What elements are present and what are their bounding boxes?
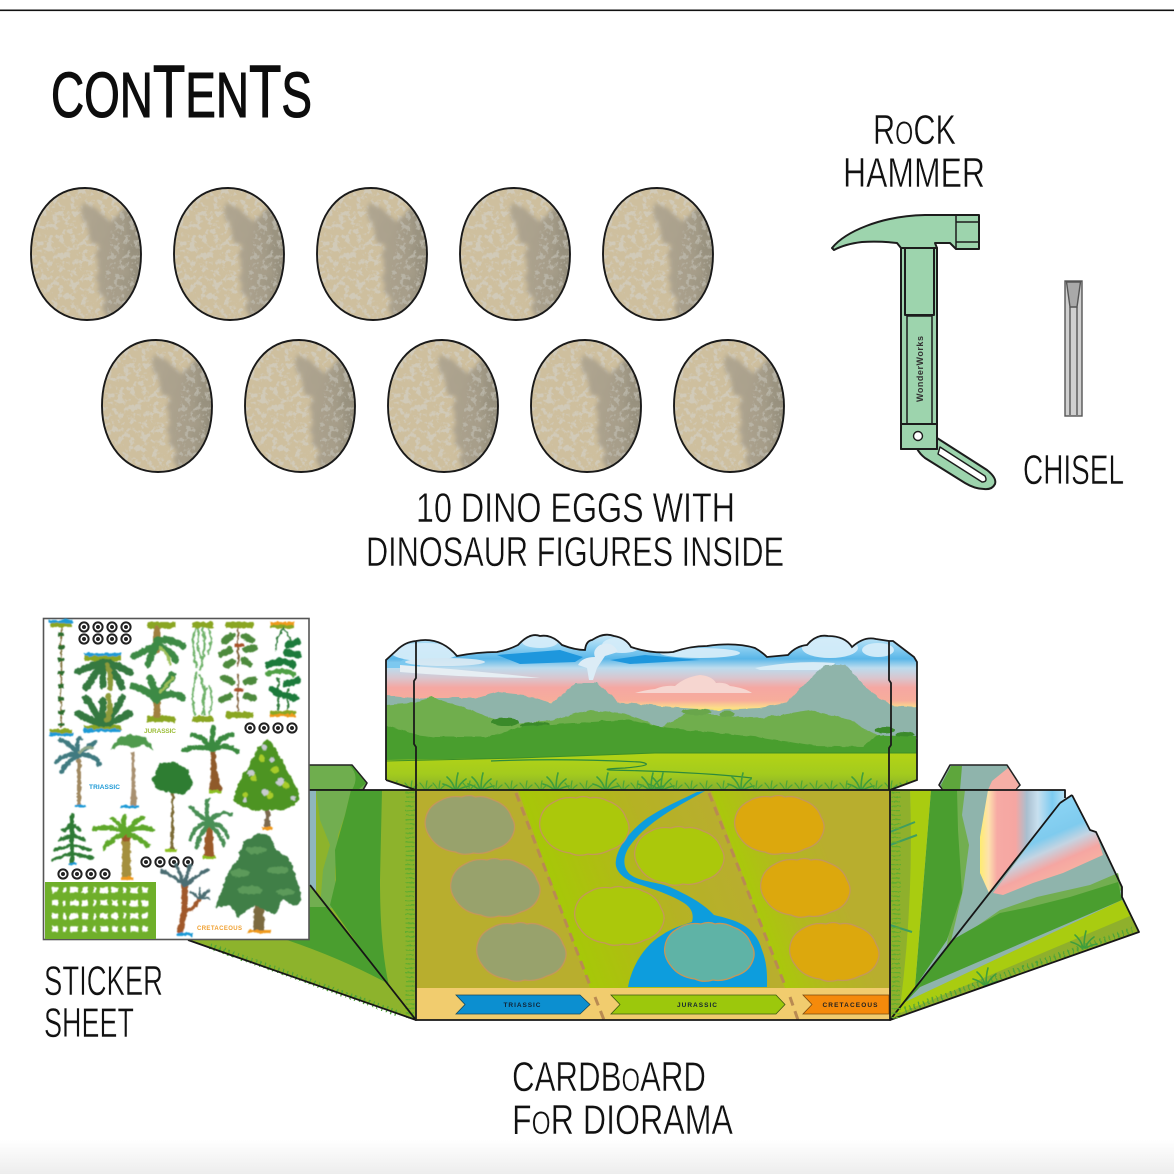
egg 5	[603, 188, 722, 330]
egg 8	[388, 340, 507, 482]
leafy plant stickers	[133, 622, 183, 722]
left lower panel	[188, 885, 416, 1020]
meadow	[386, 753, 917, 792]
cretaceous band	[711, 790, 890, 988]
foreground grass	[390, 773, 912, 790]
label: chisel: CHISEL	[1023, 446, 1124, 493]
panel: sticker sheet	[44, 618, 309, 940]
hammer brand text: WonderWorks	[915, 336, 925, 402]
clouds	[391, 636, 894, 666]
tree: dark round top	[152, 762, 193, 852]
top rule	[0, 10, 1174, 11]
label: jurassic: JURASSIC	[144, 728, 176, 735]
label: sticker sheet: SHEET	[44, 999, 134, 1046]
label: cretaceous: CRETACEOUS	[197, 926, 242, 932]
hammer head	[832, 215, 979, 250]
tree: gray palm	[56, 738, 100, 808]
label: eggs: 10 DINO EGGS WITH	[416, 484, 735, 531]
egg 1	[31, 188, 150, 330]
arrow: jurassic	[611, 995, 785, 1014]
ginkgo stickers	[222, 622, 254, 718]
handle	[901, 248, 937, 449]
right inner panel	[890, 790, 1065, 1020]
label: triassic: TRIASSIC	[89, 784, 120, 791]
arrow: jurassic: JURASSIC	[677, 1002, 717, 1009]
tree: coconut palm	[94, 816, 152, 880]
cardboard diorama	[188, 630, 1139, 1020]
right outer panel	[890, 790, 1139, 1020]
sky streaks	[386, 650, 835, 678]
icon: rock hammer	[832, 215, 995, 489]
left tab	[300, 765, 367, 790]
jurassic slots	[540, 796, 724, 945]
right fold	[890, 765, 1139, 1020]
tree: flowering conifer	[234, 739, 299, 830]
carabiner	[915, 433, 995, 489]
mid hills	[386, 696, 878, 748]
label: eggs: DINOSAUR FIGURES INSIDE	[366, 528, 784, 575]
fern stickers	[78, 653, 130, 732]
cretaceous slots	[735, 796, 879, 981]
jurassic band	[518, 790, 780, 988]
vine stickers	[192, 622, 213, 722]
period dividers	[516, 793, 798, 1020]
backdrop outline	[386, 635, 917, 790]
hanging vine sticker	[49, 620, 73, 736]
river and lake	[616, 791, 767, 987]
tree line	[491, 709, 915, 738]
dark hills	[386, 720, 917, 765]
stream	[491, 760, 752, 778]
egg 4	[460, 188, 579, 330]
dinosaur silhouette panel	[45, 882, 156, 939]
label: cardboard for diorama: FOR DIORAMA	[512, 1096, 733, 1143]
label: eggs	[366, 484, 784, 575]
dark leaf stickers	[268, 622, 298, 717]
time lane	[416, 988, 890, 1020]
tree: umbrella	[111, 735, 153, 808]
egg 7	[245, 340, 364, 482]
left upper panel	[300, 790, 416, 1020]
tree: forked cycad	[162, 865, 209, 936]
triassic slots	[425, 796, 566, 981]
arrow: cretaceous	[803, 995, 889, 1014]
left fold grass	[406, 792, 414, 1018]
arrow: triassic	[456, 995, 590, 1014]
dinosaur eggs group	[31, 188, 793, 482]
egg 9	[531, 340, 650, 482]
arrow: cretaceous: CRETACEOUS	[822, 1002, 878, 1009]
icon: chisel	[1065, 281, 1082, 416]
far mountains	[386, 664, 916, 736]
egg 10	[674, 340, 793, 482]
tree: large conifer	[215, 833, 302, 933]
right tab	[939, 765, 1020, 790]
arrow: triassic: TRIASSIC	[504, 1002, 541, 1009]
tree: fan palm	[184, 728, 238, 793]
eye stickers	[58, 622, 297, 879]
egg 6	[102, 340, 221, 482]
tree: small conifer	[52, 815, 92, 866]
label: rock hammer: ROCK	[873, 106, 956, 153]
label: rock hammer	[843, 106, 985, 196]
volcano smoke	[578, 644, 618, 680]
title: CONTENTS	[51, 50, 312, 133]
label: sticker sheet: STICKER	[44, 957, 163, 1004]
label: rock hammer: HAMMER	[843, 149, 985, 196]
egg 2	[174, 188, 293, 330]
pink cloud	[635, 675, 752, 693]
label: cardboard for diorama: CARDBOARD	[512, 1053, 706, 1100]
left fold	[188, 765, 416, 1020]
label: cardboard for diorama	[512, 1053, 733, 1143]
label: sticker sheet	[44, 957, 163, 1046]
tree: cycad	[190, 800, 230, 859]
diorama backdrop	[380, 630, 925, 792]
water slot	[665, 922, 754, 981]
egg 3	[317, 188, 436, 330]
sky	[386, 636, 916, 711]
diorama base	[416, 790, 890, 1020]
